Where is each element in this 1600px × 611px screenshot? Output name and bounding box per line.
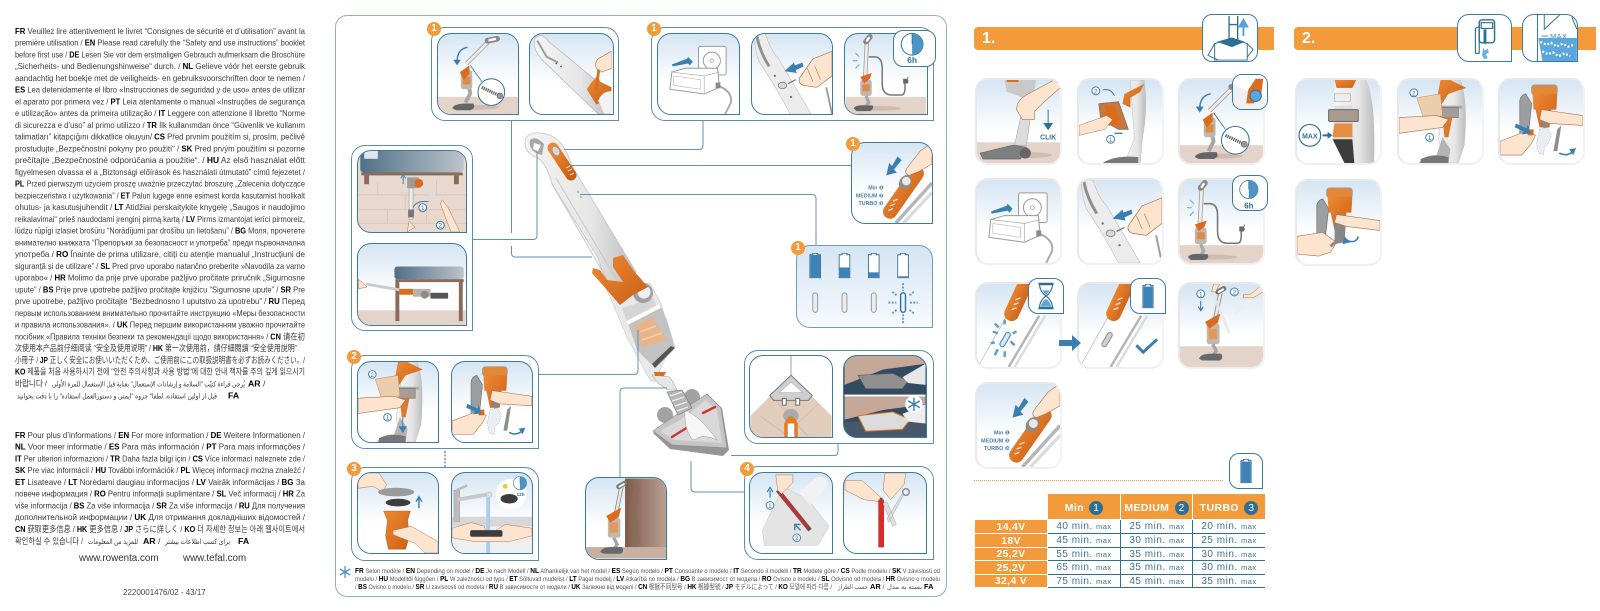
table row 14,4V: 20 min. max (1201, 521, 1257, 532)
safety instructions text: e utilização» antes da primeira utilização / IT Leggere con attenzione il libretto “Norme (15, 108, 305, 118)
panel: power button speeds (851, 142, 933, 224)
table header: Min (1065, 502, 1084, 514)
tile: charged indicator (1077, 282, 1164, 369)
panel group 4: cleaning the brushes (744, 466, 934, 560)
footnote: depending on model: / BS Ovisno o modelu / SR U zavisnosti od modela / RU В зависимости от модели / UK Залежно від моделі / CN 根据不同型号 / HK 根據型號 / JP モデルによって / KO 모델에 따라 다름 / (355, 582, 832, 591)
panel: vacuum standing in corner (585, 477, 667, 560)
footnote: depending on model: FR Selon modèle / EN Depending on model / DE Je nach Modell / NL Afhankelijk van het model / ES Según modelo / PT Consoante o modelo / IT Secondo il modelli / TR Modele göre / CS Podle modelu / SK V závislosti od (355, 566, 940, 575)
safety instructions text: talimatları” kitapçığını dikkatlice okuyun/ CS Před prvním použitím si, prosím, pečlivě (15, 132, 305, 142)
more information text: više informacija / BS Za više informacija / SR Za više informacija / RU Для получения (15, 500, 305, 510)
table row 25,2V: 25,2V (997, 548, 1025, 560)
table row 32,4V: 75 min. max (1056, 576, 1112, 587)
tile: dust cup max level: MAX (1302, 133, 1318, 140)
header bar 2: 2. (1302, 30, 1315, 47)
safety instructions text: 바랍니다 / (15, 378, 47, 388)
table row 18V: 45 min. max (1056, 535, 1112, 546)
panel: fit stem with screw (437, 33, 519, 115)
table header: 2 (1179, 502, 1185, 514)
safety instructions text: посібник «Правила техніки безпеки та рекомендації щодо використання» / CN 请在初 (15, 330, 305, 342)
step badge 3 (347, 462, 361, 476)
table row 25,2V second: 65 min. max (1056, 562, 1112, 573)
panel: power button speeds: TURBO ❸ (858, 201, 883, 207)
panel: connect to vacuum (751, 33, 833, 115)
more information text: للمزيد من المعلومات (88, 537, 138, 546)
callout: 6h charge clock: 6h (907, 55, 917, 65)
step badge 3: 3 (351, 463, 357, 474)
header bar 1: 1. (982, 30, 995, 47)
more information text (15, 430, 306, 546)
more information text: CN 获取更多信息 / HK 更多信息 / JP さらに詳しく / KO 더 자세한 정보는 아래 웹사이트에서 (15, 523, 305, 534)
tile: fit stem with screw (1178, 78, 1265, 165)
header bar 2 (1294, 27, 1596, 50)
callout: 6h charge clock (1232, 175, 1268, 211)
icon: dust cup max level: MAX (1550, 32, 1568, 41)
footnote: depending on model: بسته به مدل (887, 584, 922, 591)
tile: close dust cup (1295, 179, 1382, 266)
panel: orange strap on handle (529, 33, 614, 115)
step badge 1: 1 (795, 242, 801, 253)
panel: under furniture, light on (843, 355, 927, 438)
more information text: FA (238, 536, 250, 546)
panel group 1: assembling the handle (431, 27, 619, 121)
indicator lights row (813, 283, 918, 324)
table row 32,4V: 32,4 V (995, 575, 1027, 587)
safety instructions text: prostudujte „Bezpečnostní pokyny pro použití“ / SK Pred prvým použitím si pozorne (15, 144, 305, 154)
safety instructions text: AR / (248, 378, 266, 388)
main panel frame (335, 15, 947, 597)
icon: hourglass overlay (1028, 278, 1064, 314)
tile: insert dust cup: 2 (1094, 88, 1098, 95)
table row 18V: 18V (1001, 535, 1021, 547)
table row 32,4V (975, 575, 1265, 588)
safety instructions text: prve upotrebe, pažljivo pročitajte “Bezbednosno I uputstvo za upotrebu” / RU Перед (15, 296, 305, 306)
header bar 1 (974, 27, 1274, 50)
step badge 1: 1 (850, 138, 856, 149)
table row 25,2V: 55 min. max (1056, 549, 1112, 560)
footnote: depending on model: modelu / HU Modelltől függően / PL W zależności od typu / ET Sõltuvalt mudelist / LT Pagal modelį / LV Atkarībā no modeļa / BG В зависимост от модела / RO Ovisno o modelu / SL Odvisno od modela / HR Ovisno o modelu (355, 574, 940, 583)
panel: power button speeds: MEDIUM ❷ (856, 193, 883, 199)
panel: rinse under tap: 12h (516, 492, 525, 498)
tile: power button speeds: Min ❶ (994, 430, 1010, 436)
table row 18V (975, 534, 1265, 548)
safety instructions text: prečítajte „Bezpečnostné odporúčania a použitie“. / HU Az első használat előtt (15, 155, 306, 165)
icon: full battery overlay (1130, 278, 1166, 314)
panel: power button speeds: Min ❶ (868, 186, 883, 192)
safety instructions text: reikalavimai“ prieš naudodami įrenginį pirmą kartą / LV Pirms izmantojat ierīci pirmoreiz, (15, 214, 305, 224)
icon: dust cup (1457, 14, 1512, 62)
step badge 1 (791, 241, 805, 255)
tile: dust cup max level (1295, 78, 1382, 165)
safety instructions text: قبل از اولین استفاده، لطفا" جزوه "ایمنی و دستورالعمل استفاده" را با دقت بخوانید (17, 392, 217, 400)
neck and floor head (652, 372, 729, 456)
footnote: depending on model: AR / (870, 582, 885, 591)
website rowenta: www.rowenta.com (79, 553, 158, 564)
product code: 2220001476/02 - 43/17 (123, 588, 206, 597)
table header (1048, 494, 1265, 519)
table row 25,2V second: 25,2V (997, 562, 1025, 574)
table row 25,2V: 30 min. max (1201, 549, 1257, 560)
more information text: ET Lisateave / LT Norėdami daugiau informacijos / LV Vairāk informācijas / BG За (15, 477, 305, 487)
tile: indicator blinking (975, 282, 1062, 369)
panel: remove brush: 1 (768, 503, 772, 510)
footnote: depending on model: FA (924, 582, 934, 591)
stick vacuum illustration (524, 132, 729, 456)
step badge 2: 2 (351, 351, 357, 362)
panel: vacuum flat under table (357, 243, 467, 326)
safety instructions text: FA (228, 390, 240, 400)
tile: remove dust cup: 2 (1412, 90, 1416, 97)
table row 25,2V second (975, 561, 1265, 575)
panel: remove dust cup: 2 (371, 372, 375, 379)
tile: charging position: 1 (1199, 291, 1203, 298)
safety instructions text: lūdzu rūpīgi izlasiet brošūru “Norādījumi par drošību un lietošanu” / BG Моля, прочетете (15, 226, 305, 236)
more information text: 확인하실 수 있습니다 / (15, 535, 83, 546)
panel: remove dust cup: 1 (386, 415, 390, 422)
panel: plug in charger (657, 33, 740, 115)
step badge 1 (647, 22, 661, 36)
table row 14,4V: 25 min. max (1129, 521, 1185, 532)
more information text: FR Pour plus d’informations / EN For more information / DE Weitere Informationen / (15, 430, 306, 440)
tile: power button speeds: MEDIUM ❷ (981, 438, 1010, 444)
table row 14,4V: 40 min. max (1056, 521, 1112, 532)
callout: 6h charge clock (893, 30, 936, 67)
safety instructions text: di sicurezza e d’uso” al primo utilizzo / TR İlk kullanımdan önce “Güvenlik ve kullanım (15, 120, 305, 130)
step badge 4: 4 (744, 463, 750, 474)
panel: empty dust cup (451, 361, 533, 443)
safety instructions text (15, 26, 306, 400)
more information text: برای کسب اطلاعات بیشتر (164, 537, 230, 546)
icon: dust cup max level (1522, 14, 1578, 62)
table row 25,2V: 35 min. max (1129, 549, 1185, 560)
more information text: SK Pre viac informácií / HU További információk / PL Więcej informacji można znaleźć / (15, 465, 305, 475)
footnote: depending on model (355, 566, 940, 591)
panel: remove dust cup (357, 361, 439, 443)
panel group: storing under furniture (351, 145, 473, 331)
footnote: depending on model: حسب الطراز (837, 584, 868, 591)
panel group: corners and cleaning under furniture (744, 350, 934, 444)
panel group 3: washing the filter (351, 467, 539, 561)
step badge 2 (347, 350, 361, 364)
table header: TURBO (1200, 502, 1239, 514)
step badge 1: 1 (431, 23, 437, 34)
step badge 1: 1 (651, 23, 657, 34)
safety instructions text: ohutus- ja kasutusjuhendit / LT Atidžiai perskaitykite knygelę „Saugos ir naudojimo (15, 202, 305, 212)
table row 25,2V second: 35 min. max (1129, 562, 1185, 573)
dust cup body (605, 283, 675, 382)
table row 14,4V (975, 520, 1265, 534)
panel: vacuum folding under sofa (357, 150, 467, 233)
table header: 3 (1248, 502, 1254, 514)
table header: 1 (1093, 502, 1099, 514)
table row 25,2V second: 30 min. max (1201, 562, 1257, 573)
panel: corner cleaning (749, 355, 833, 438)
panel: remove brush (749, 472, 833, 554)
safety instructions text: употреба / RO Înainte de prima utilizare, citiți cu atenție manualul „Instrucțiuni de (15, 249, 305, 259)
step badge 1 (427, 22, 441, 36)
step badge 1 (846, 137, 860, 151)
step badge 4 (740, 462, 754, 476)
table row 25,2V (975, 548, 1265, 561)
vacuum handle and stem (525, 133, 636, 300)
runtime table (975, 494, 1265, 588)
tile: power button speeds (975, 382, 1062, 469)
tile: click floor head onto body: CLIK (1040, 134, 1056, 141)
safety instructions text: upute” / BS Prije prve upotrebe pažljivo pročitajte knjižicu “Sigurnosne upute” / SR Pre (15, 284, 305, 294)
arrow: next step (1059, 335, 1081, 351)
panel: charging vacuum (844, 33, 928, 115)
website tefal: www.tefal.com (183, 553, 246, 564)
tile: charging position (1178, 282, 1265, 369)
safety instructions text: „Sicherheits- und Bedienungshinweise“ durch. / NL Gelieve vóór het eerste gebruik (15, 61, 306, 71)
panel group: charging setup (651, 27, 934, 121)
safety instructions text: يُرجى قراءة كتيّب "السلامة و إرشادات الإستعمال" بعناية قبل الإستعمال للمرة الأولى (52, 378, 245, 388)
more information text: повече информация / RO Pentru informații suplimentare / SL Več informacij / HR Za (15, 489, 305, 499)
more information text: NL Voor meer informatie / ES Para más información / PT Para mais informações / (15, 442, 306, 452)
table row 32,4V: 45 min. max (1129, 576, 1185, 587)
panel group 2: emptying the dust cup (351, 355, 539, 449)
table row 18V: 30 min. max (1129, 535, 1185, 546)
battery levels row (810, 253, 908, 278)
more information text: AR / (143, 536, 161, 546)
icon: lift vacuum out of box (1202, 14, 1258, 62)
panel: cut hair on brush (843, 472, 927, 554)
tile: remove dust cup (1397, 78, 1484, 165)
table row 32,4V: 35 min. max (1201, 576, 1257, 587)
more information text: IT Per ulteriori informazioni / TR Daha fazla bilgi için / CS Více informací naleznete zde / (15, 454, 305, 464)
panel: remove brush: 2 (795, 535, 799, 542)
icon: screw detail overlay (1232, 74, 1268, 110)
panel: vacuum folding under sofa: 1 (421, 205, 425, 212)
tile: click floor head onto body (975, 78, 1062, 165)
panel: rinse under tap (451, 472, 533, 554)
tile: connect to vacuum (1077, 178, 1164, 265)
tile: empty dust cup (1498, 78, 1585, 165)
tile: plug in charger (975, 178, 1062, 265)
panel: vacuum folding under sofa: 2 (438, 223, 442, 230)
panel: battery level indicators (796, 245, 933, 328)
icon: battery box (1229, 453, 1263, 489)
tile: charging vacuum (1178, 178, 1265, 265)
tile: power button speeds: TURBO ❸ (984, 446, 1010, 452)
tile: remove dust cup: 1 (1428, 135, 1432, 142)
table row 14,4V: 14,4V (997, 521, 1025, 533)
tile: insert dust cup: 1 (1109, 137, 1113, 144)
tile: charging position: 2 (1233, 289, 1237, 296)
table row 18V: 25 min. max (1201, 535, 1257, 546)
panel: filter parts (357, 472, 439, 554)
footnote asterisk icon (340, 566, 350, 578)
orange saddle (592, 255, 648, 305)
tile: insert dust cup (1077, 78, 1164, 165)
dotted divider (974, 480, 1223, 481)
more information text: дополнительной информации / UK Для отримання докладніших відомостей / (15, 512, 306, 522)
table header: MEDIUM (1124, 502, 1169, 514)
